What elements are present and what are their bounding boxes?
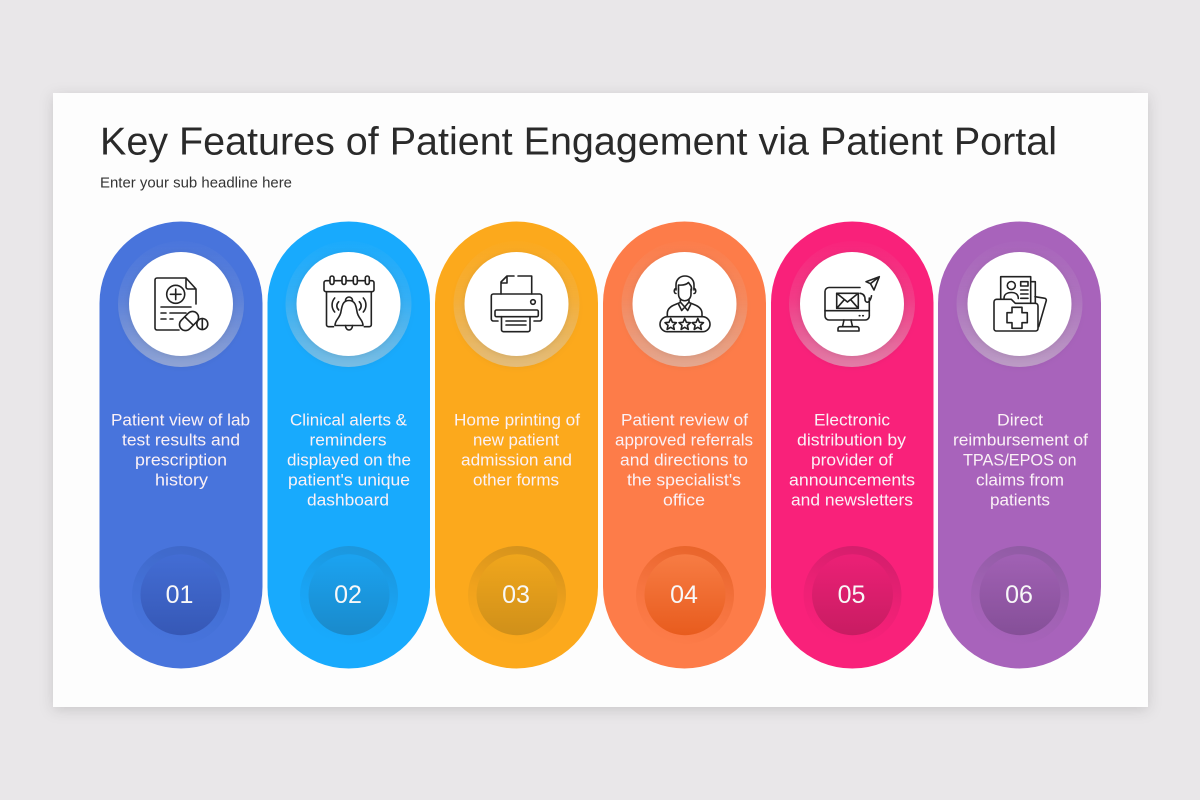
text: feature 02: dashboard — [307, 491, 389, 510]
text: feature 02 — [287, 411, 411, 510]
text: feature 05: Electronic — [814, 411, 891, 430]
text: feature 05: provider of — [811, 451, 893, 470]
text: feature 04: and directions to — [620, 451, 748, 470]
number 05 — [804, 546, 902, 644]
title: Key Features of Patient Engagement via Patient Portal — [100, 120, 1057, 164]
number 06: 06 — [1005, 581, 1033, 609]
panel: feature 02 — [268, 222, 430, 668]
text: feature 06: patients — [990, 491, 1050, 510]
text: feature 05: distribution by — [797, 431, 907, 450]
icon: printer — [491, 276, 542, 332]
number 06 — [971, 546, 1069, 644]
number 04 — [636, 546, 734, 644]
number 01 — [132, 546, 230, 644]
text: feature 01: history — [155, 471, 209, 490]
icon: monitor with envelope and paper plane — [825, 277, 879, 331]
text: feature 04: office — [663, 491, 705, 510]
number 01: 01 — [166, 581, 193, 609]
number 05: 05 — [838, 581, 865, 609]
text: feature 02: displayed on the — [287, 451, 411, 470]
panel: feature 04 — [603, 222, 766, 668]
icon: lab report and pills — [155, 278, 208, 333]
text: feature 06: claims from — [976, 471, 1064, 490]
text: feature 06: reimbursement of — [953, 431, 1088, 450]
slide card — [53, 93, 1148, 707]
panel: feature 03 — [435, 222, 598, 668]
number 04: 04 — [670, 581, 698, 609]
text: feature 06: Direct — [997, 411, 1043, 430]
text: feature 03 — [454, 411, 580, 490]
text: feature 02: Clinical alerts & — [290, 411, 408, 430]
subtitle: Enter your sub headline here — [100, 174, 292, 192]
text: feature 03: new patient — [473, 431, 559, 450]
text: feature 06: TPAS/EPOS on — [963, 451, 1076, 470]
text: feature 02: patient's unique — [288, 471, 410, 490]
text: feature 03: admission and — [461, 451, 572, 470]
number 03: 03 — [502, 581, 530, 609]
text: feature 06 — [953, 411, 1088, 510]
text: feature 04: Patient review of — [621, 411, 748, 430]
text: feature 01 — [111, 411, 250, 490]
text: feature 01: Patient view of lab — [111, 411, 250, 430]
text: feature 04 — [615, 411, 753, 510]
icon: calendar bell — [324, 276, 374, 330]
text: feature 05: and newsletters — [791, 491, 913, 510]
text: feature 01: prescription — [135, 451, 227, 470]
text: feature 01: test results and — [122, 431, 240, 450]
icon: medical folder — [994, 277, 1046, 331]
icon: person with star rating — [660, 276, 710, 332]
number 02: 02 — [334, 581, 362, 609]
text: feature 04: approved referrals — [615, 431, 753, 450]
text: feature 04: the specialist's — [627, 471, 741, 490]
panel: feature 01 — [100, 222, 262, 668]
text: feature 05 — [789, 411, 915, 510]
panel: feature 05 — [771, 222, 934, 668]
number 02 — [300, 546, 398, 644]
panel: feature 06 — [938, 222, 1101, 668]
text: feature 05: announcements — [789, 471, 915, 490]
number 03 — [468, 546, 566, 644]
text: feature 02: reminders — [310, 431, 386, 450]
text: feature 03: Home printing of — [454, 411, 580, 430]
text: feature 03: other forms — [473, 471, 559, 490]
